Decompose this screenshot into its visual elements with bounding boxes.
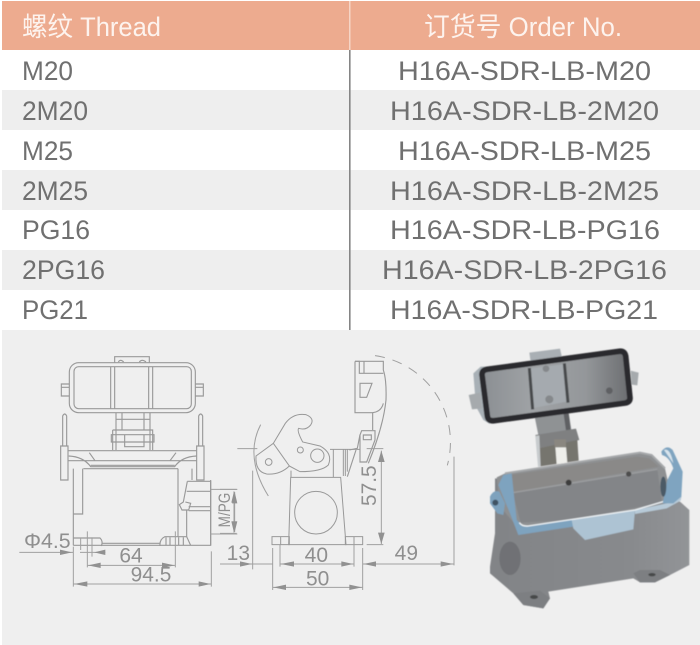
cover tab	[529, 349, 562, 362]
product photo	[469, 349, 689, 608]
thread column	[22, 56, 105, 325]
order number column: H16A-SDR-LB-2PG16	[382, 255, 667, 285]
dimension: 94.5: 94.5	[131, 563, 171, 586]
dimension: 13: 13	[227, 542, 250, 565]
dimension lines	[19, 489, 237, 587]
dimension arrows	[232, 451, 453, 590]
housing top opening	[497, 453, 673, 530]
dimension: 49: 49	[395, 542, 418, 565]
dimension: 40: 40	[305, 544, 328, 567]
order number column: H16A-SDR-LB-PG16	[390, 215, 660, 245]
cover	[61, 357, 203, 450]
cover	[469, 351, 639, 424]
housing	[61, 414, 211, 546]
swing arcs and dimension lines	[220, 356, 454, 590]
housing side	[272, 449, 363, 545]
dimension: phi 4.5: Φ4.5	[24, 530, 71, 553]
thread column: M20	[22, 56, 73, 86]
thread column: PG21	[22, 295, 88, 325]
thread column: 2M25	[22, 176, 88, 206]
dimension arrows	[60, 491, 237, 587]
table rows	[2, 50, 700, 330]
order number column: H16A-SDR-LB-M20	[398, 56, 651, 86]
dimension: M/PG: M/PG	[215, 493, 234, 527]
thread column: 2PG16	[22, 255, 105, 285]
hinge arm	[535, 411, 579, 467]
dimension: 64: 64	[119, 545, 143, 568]
dimension: 50: 50	[306, 567, 329, 590]
side view technical drawing	[220, 356, 454, 590]
thread column: M25	[22, 136, 73, 166]
heading: thread: 螺纹 Thread	[22, 12, 161, 42]
locking lever	[256, 414, 330, 474]
lower panel background	[2, 330, 700, 645]
dimension: 57.5: 57.5	[358, 465, 381, 506]
order number column: H16A-SDR-LB-PG21	[390, 295, 658, 325]
front view technical drawing	[19, 357, 237, 587]
thread column: 2M20	[22, 96, 88, 126]
metal locking lever	[490, 447, 683, 540]
housing body	[490, 478, 689, 608]
thread column: PG16	[22, 215, 90, 245]
heading: order number: 订货号 Order No.	[424, 12, 622, 42]
order number column: H16A-SDR-LB-2M20	[390, 96, 659, 126]
order number column	[382, 56, 667, 325]
order number column: H16A-SDR-LB-2M25	[390, 176, 659, 206]
table header	[2, 1, 700, 50]
hinged cover	[347, 361, 386, 477]
order number column: H16A-SDR-LB-M25	[398, 136, 651, 166]
